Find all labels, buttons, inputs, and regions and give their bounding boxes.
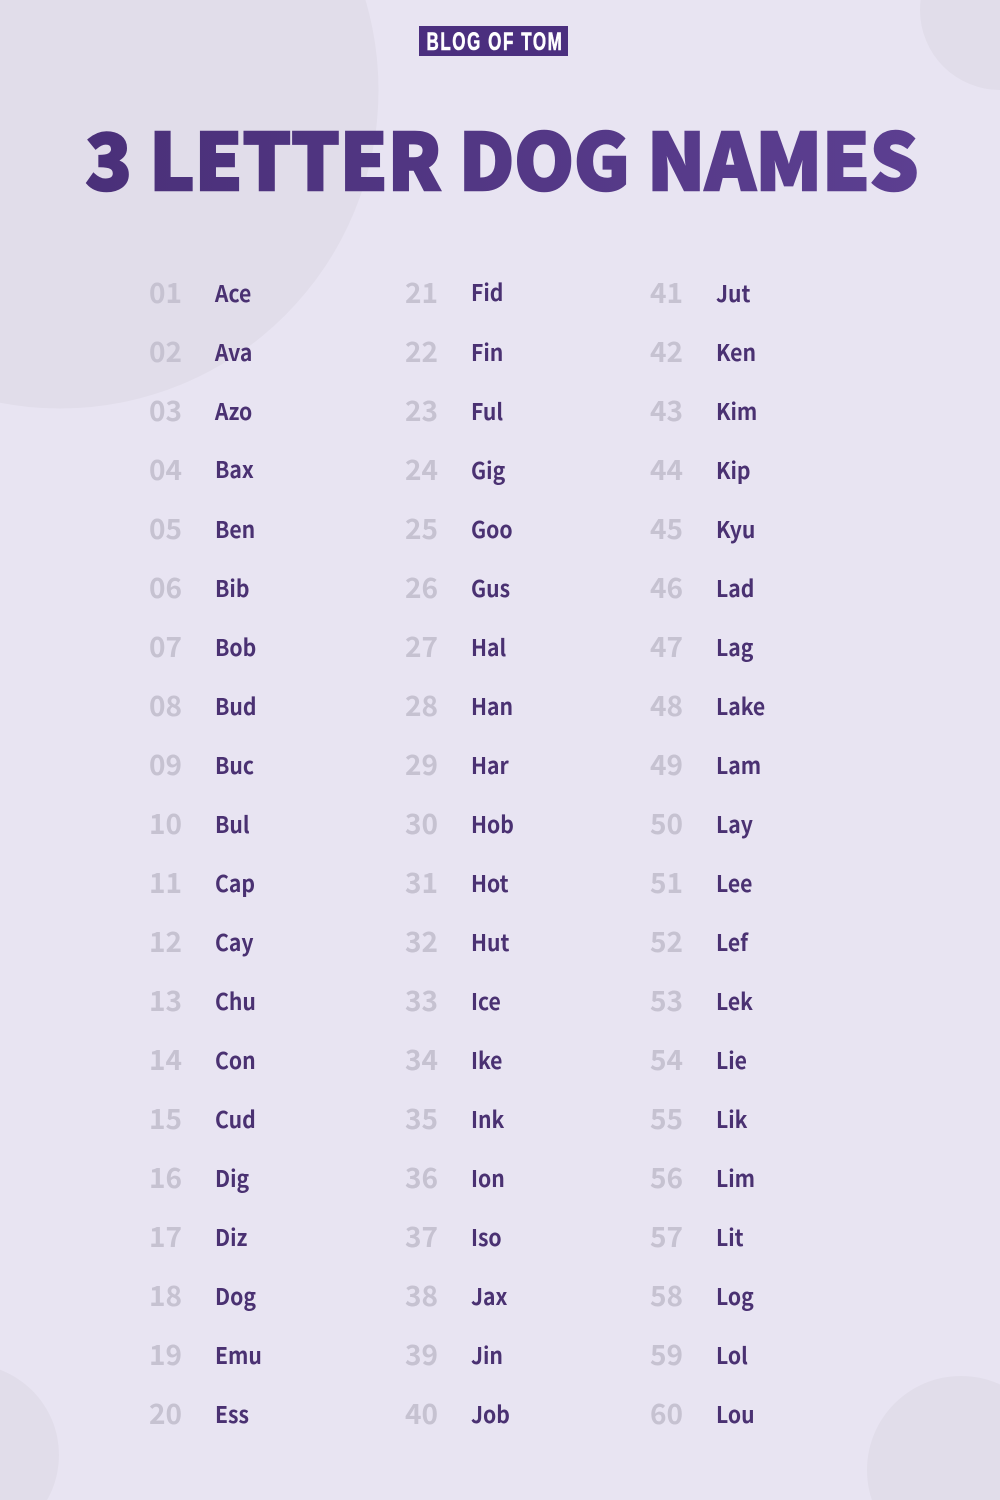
row 33: Ice <box>471 984 501 1017</box>
row 55 <box>650 1098 748 1138</box>
row 05: Ben <box>215 512 255 545</box>
row 24: Gig <box>471 453 505 486</box>
row 01: 01 <box>149 272 182 312</box>
row 19 <box>149 1334 262 1374</box>
row 48: 48 <box>650 685 683 725</box>
row 30 <box>405 803 514 843</box>
row 55: 55 <box>650 1098 683 1138</box>
row 20 <box>149 1393 249 1433</box>
row 28: Han <box>471 689 513 722</box>
row 34: Ike <box>471 1043 502 1076</box>
row 46: Lad <box>716 571 754 604</box>
row 04 <box>149 449 254 489</box>
row 56: 56 <box>650 1157 683 1197</box>
decorative circle: top left <box>0 0 378 408</box>
row 13: Chu <box>215 984 256 1017</box>
row 16: Dig <box>215 1161 249 1194</box>
row 37: Iso <box>471 1220 502 1253</box>
row 50: 50 <box>650 803 683 843</box>
row 45: Kyu <box>716 512 755 545</box>
row 39 <box>405 1334 503 1374</box>
row 50: Lay <box>716 807 753 840</box>
row 49: 49 <box>650 744 683 784</box>
row 43 <box>650 390 757 430</box>
row 57: Lit <box>716 1220 744 1253</box>
row 32: Hut <box>471 925 509 958</box>
row 57 <box>650 1216 744 1256</box>
row 44 <box>650 449 751 489</box>
row 45 <box>650 508 755 548</box>
row 10: 10 <box>149 803 182 843</box>
row 53: Lek <box>716 984 754 1017</box>
row 10 <box>149 803 250 843</box>
row 15: 15 <box>149 1098 182 1138</box>
row 56: Lim <box>716 1161 755 1194</box>
row 22 <box>405 331 503 371</box>
column 1: names 01 to 20 <box>149 272 262 1433</box>
row 47: Lag <box>716 630 753 663</box>
row 29: Har <box>471 748 509 781</box>
row 07: 07 <box>149 626 182 666</box>
row 34: 34 <box>405 1039 438 1079</box>
row 18 <box>149 1275 256 1315</box>
row 59: Lol <box>716 1338 748 1371</box>
row 52 <box>650 921 749 961</box>
row 12: Cay <box>215 925 254 958</box>
row 60 <box>650 1393 755 1433</box>
row 17: Diz <box>215 1220 247 1253</box>
row 16: 16 <box>149 1157 182 1197</box>
row 06: 06 <box>149 567 182 607</box>
row 32 <box>405 921 509 961</box>
row 58: Log <box>716 1279 754 1312</box>
row 46: 46 <box>650 567 683 607</box>
row 07: Bob <box>215 630 256 663</box>
row 42: 42 <box>650 331 683 371</box>
row 01: Ace <box>214 276 251 309</box>
decorative circle: top right <box>920 0 1000 90</box>
row 40: Job <box>471 1397 510 1430</box>
row 10: Bul <box>215 807 250 840</box>
row 36: Ion <box>471 1161 505 1194</box>
row 60: 60 <box>650 1393 683 1433</box>
row 11: Cap <box>215 866 255 899</box>
row 33 <box>405 980 501 1020</box>
row 02 <box>149 331 252 371</box>
row 48: Lake <box>716 689 765 722</box>
row 44: 44 <box>650 449 683 489</box>
row 31 <box>405 862 509 902</box>
decorative circle: bottom left <box>0 1364 59 1500</box>
row 22: Fin <box>471 335 503 368</box>
row 19: Emu <box>215 1338 262 1371</box>
row 44: Kip <box>716 453 751 486</box>
row 07 <box>149 626 256 666</box>
row 38: Jax <box>471 1279 508 1312</box>
row 40 <box>405 1393 510 1433</box>
row 59: 59 <box>650 1334 683 1374</box>
row 53: 53 <box>650 980 683 1020</box>
row 49 <box>650 744 761 784</box>
row 09: Buc <box>215 748 254 781</box>
row 09: 09 <box>149 744 182 784</box>
row 45: 45 <box>650 508 683 548</box>
row 03 <box>149 390 252 430</box>
row 47: 47 <box>650 626 683 666</box>
row 56 <box>650 1157 755 1197</box>
row 41: 41 <box>650 272 683 312</box>
row 50 <box>650 803 753 843</box>
row 18: 18 <box>149 1275 182 1315</box>
row 22: 22 <box>405 331 438 371</box>
row 03: Azo <box>214 394 252 427</box>
row 15: Cud <box>215 1102 256 1135</box>
row 42: Ken <box>716 335 756 368</box>
row 25: Goo <box>471 512 513 545</box>
row 17: 17 <box>149 1216 182 1256</box>
row 39: Jin <box>471 1338 503 1371</box>
row 41 <box>650 272 750 312</box>
row 53 <box>650 980 754 1020</box>
row 19: 19 <box>149 1334 182 1374</box>
row 59 <box>650 1334 748 1374</box>
row 26: Gus <box>471 571 510 604</box>
row 27: 27 <box>405 626 438 666</box>
row 58 <box>650 1275 754 1315</box>
row 41: Jut <box>716 276 750 309</box>
row 31: Hot <box>471 866 509 899</box>
title: 3 LETTER DOG NAMES <box>86 101 918 213</box>
row 42 <box>650 331 756 371</box>
row 25 <box>405 508 513 548</box>
row 31: 31 <box>405 862 438 902</box>
row 33: 33 <box>405 980 438 1020</box>
row 06: Bib <box>215 571 249 604</box>
row 38: 38 <box>405 1275 438 1315</box>
row 21 <box>405 272 503 312</box>
row 16 <box>149 1157 249 1197</box>
row 57: 57 <box>650 1216 683 1256</box>
row 08: Bud <box>215 689 256 722</box>
row 23: 23 <box>405 390 438 430</box>
row 08 <box>149 685 256 725</box>
row 37: 37 <box>405 1216 438 1256</box>
logo: Blog of Tom: BLOG OF TOM <box>426 28 562 56</box>
row 01 <box>149 272 251 312</box>
row 35: 35 <box>405 1098 438 1138</box>
row 38 <box>405 1275 508 1315</box>
row 05: 05 <box>149 508 182 548</box>
decorative circle: bottom right <box>867 1376 1000 1500</box>
row 49: Lam <box>716 748 761 781</box>
row 51: 51 <box>650 862 683 902</box>
row 30: Hob <box>471 807 514 840</box>
row 11 <box>149 862 255 902</box>
row 23: Ful <box>471 394 503 427</box>
row 14 <box>149 1039 256 1079</box>
row 46 <box>650 567 754 607</box>
row 39: 39 <box>405 1334 438 1374</box>
row 34 <box>405 1039 502 1079</box>
row 23 <box>405 390 503 430</box>
row 04: Bax <box>215 452 254 485</box>
column 3: names 41 to 60 <box>650 272 765 1433</box>
row 08: 08 <box>149 685 182 725</box>
row 02: 02 <box>149 331 182 371</box>
row 11: 11 <box>149 862 182 902</box>
row 12: 12 <box>149 921 182 961</box>
row 15 <box>149 1098 256 1138</box>
row 04: 04 <box>149 449 182 489</box>
row 37 <box>405 1216 502 1256</box>
row 27 <box>405 626 506 666</box>
row 35 <box>405 1098 505 1138</box>
row 27: Hal <box>471 630 506 663</box>
row 32: 32 <box>405 921 438 961</box>
row 05 <box>149 508 255 548</box>
row 58: 58 <box>650 1275 683 1315</box>
row 35: Ink <box>471 1102 505 1135</box>
row 26: 26 <box>405 567 438 607</box>
row 30: 30 <box>405 803 438 843</box>
row 36: 36 <box>405 1157 438 1197</box>
row 54: Lie <box>716 1043 747 1076</box>
row 03: 03 <box>149 390 182 430</box>
row 14: Con <box>215 1043 256 1076</box>
row 60: Lou <box>716 1397 755 1430</box>
row 36 <box>405 1157 505 1197</box>
row 21: 21 <box>405 272 438 312</box>
row 40: 40 <box>405 1393 438 1433</box>
row 02: Ava <box>214 335 252 368</box>
row 24: 24 <box>405 449 438 489</box>
row 13 <box>149 980 256 1020</box>
row 21: Fid <box>471 275 503 308</box>
row 17 <box>149 1216 247 1256</box>
row 52: Lef <box>716 925 749 958</box>
column 2: names 21 to 40 <box>405 272 514 1433</box>
row 28 <box>405 685 513 725</box>
row 51 <box>650 862 752 902</box>
row 13: 13 <box>149 980 182 1020</box>
row 43: Kim <box>716 394 757 427</box>
row 14: 14 <box>149 1039 182 1079</box>
row 51: Lee <box>716 866 752 899</box>
row 28: 28 <box>405 685 438 725</box>
row 26 <box>405 567 510 607</box>
row 29 <box>405 744 509 784</box>
row 48 <box>650 685 765 725</box>
row 43: 43 <box>650 390 683 430</box>
row 12 <box>149 921 254 961</box>
row 24 <box>405 449 505 489</box>
row 52: 52 <box>650 921 683 961</box>
row 55: Lik <box>716 1102 748 1135</box>
row 06 <box>149 567 249 607</box>
row 25: 25 <box>405 508 438 548</box>
row 54: 54 <box>650 1039 683 1079</box>
row 20: 20 <box>149 1393 182 1433</box>
row 20: Ess <box>215 1397 249 1430</box>
row 47 <box>650 626 753 666</box>
row 18: Dog <box>215 1279 256 1312</box>
row 54 <box>650 1039 747 1079</box>
row 29: 29 <box>405 744 438 784</box>
row 09 <box>149 744 254 784</box>
